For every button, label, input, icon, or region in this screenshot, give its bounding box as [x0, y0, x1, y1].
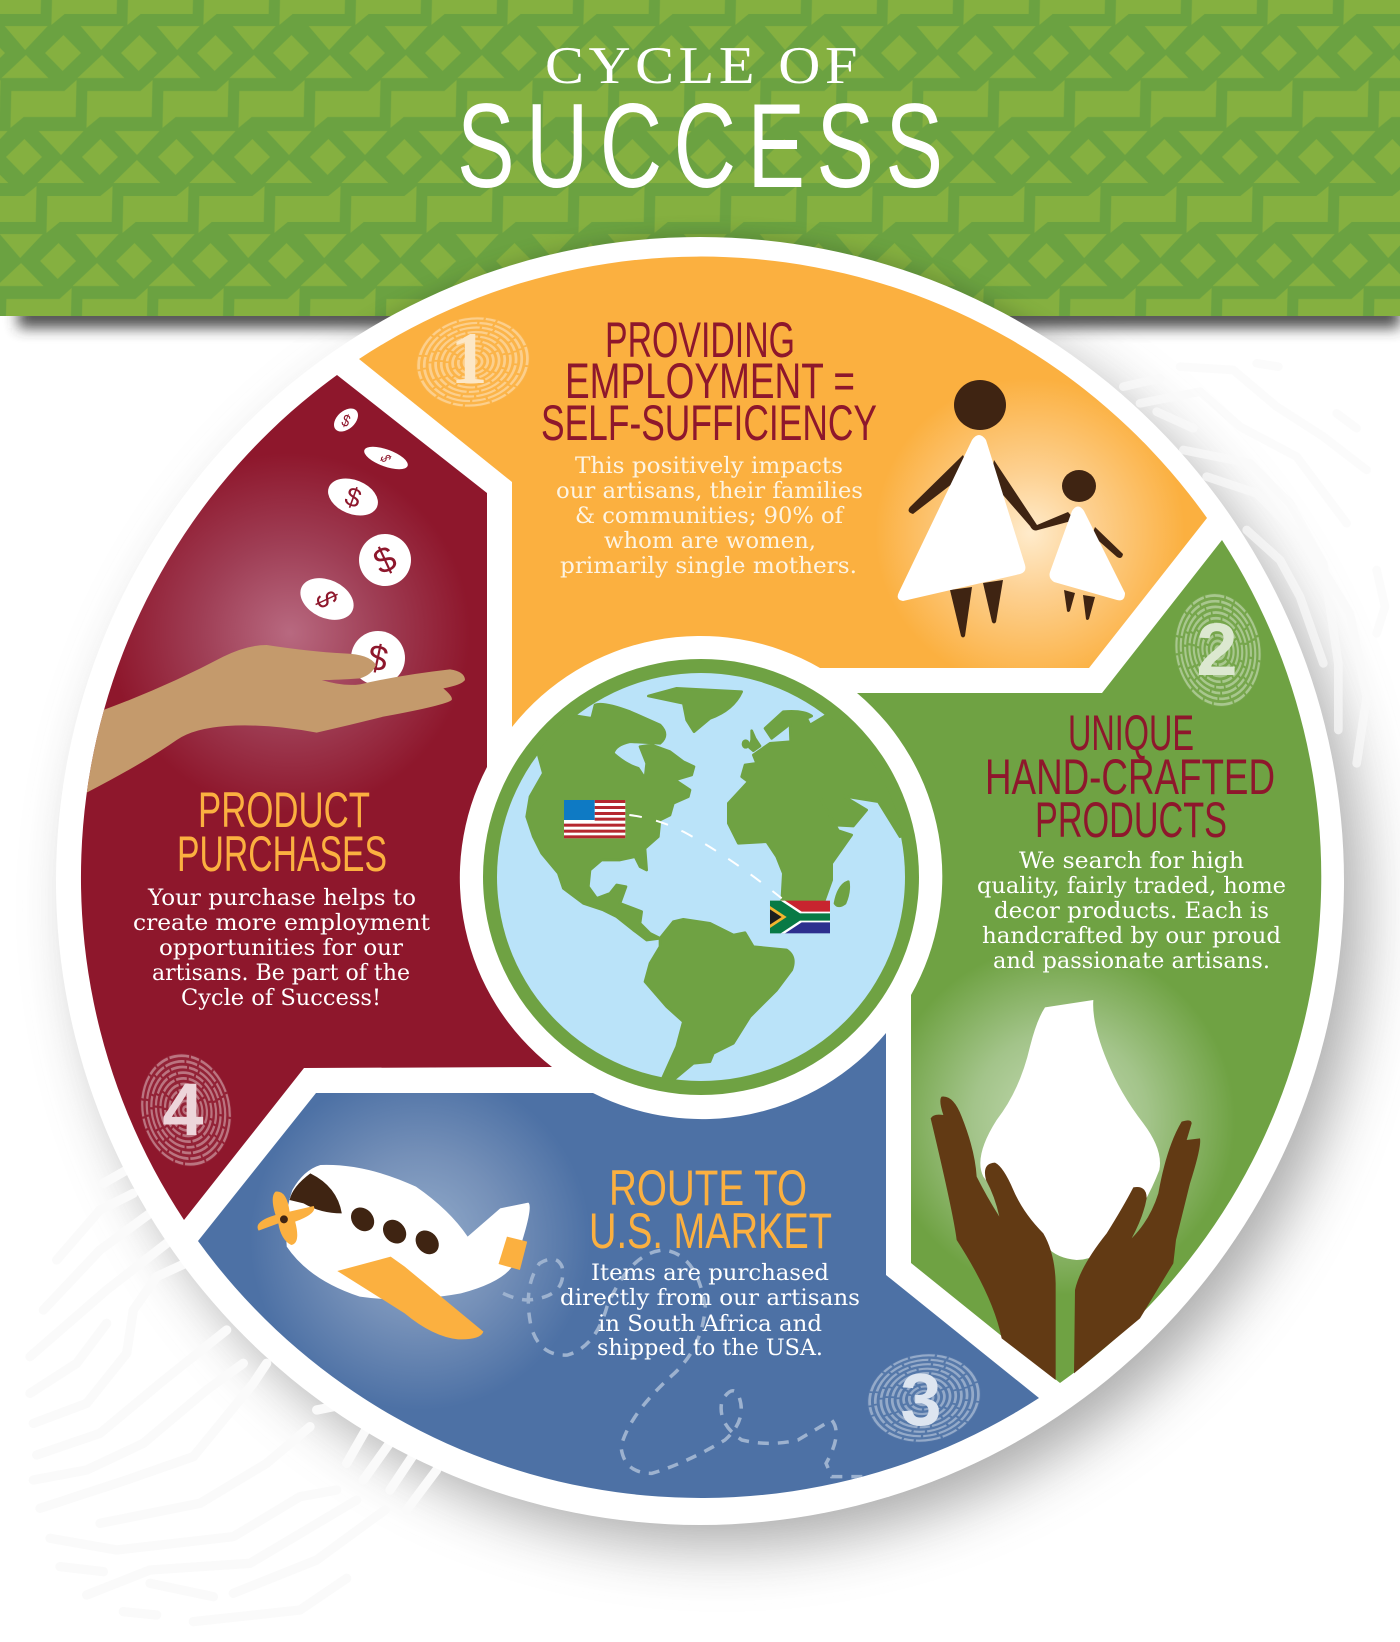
heading 3: U.S. MARKET	[589, 1203, 832, 1259]
panel 1: orange employment	[359, 257, 1207, 727]
number 4 with fingerprint	[130, 1045, 242, 1175]
heading 2	[985, 705, 1275, 848]
banner shadow	[18, 304, 1400, 328]
body 4: Cycle of Success!	[181, 986, 381, 1011]
icon: falling coins	[294, 404, 411, 685]
body 3: in South Africa and	[598, 1312, 822, 1337]
heading 1: PROVIDING	[605, 312, 795, 368]
number 2 with fingerprint: 2	[1196, 608, 1238, 691]
body 1: our artisans, their families	[556, 479, 863, 504]
heading 2: HAND-CRAFTED	[985, 749, 1275, 805]
title line: success: SUCCESS	[457, 79, 943, 213]
heading 1: EMPLOYMENT =	[565, 353, 855, 409]
title line: cycle of: CYCLE OF	[545, 36, 857, 95]
body 2: and passionate artisans.	[993, 949, 1270, 974]
number 4 with fingerprint: 4	[162, 1068, 204, 1151]
body 1: This positively impacts	[575, 454, 843, 479]
title	[457, 36, 943, 213]
body 3: Items are purchased	[591, 1261, 829, 1286]
icon: falling coins: $	[309, 586, 345, 612]
panel 3: blue route	[198, 1033, 1039, 1498]
flag: South Africa	[770, 901, 830, 933]
body 1: whom are women,	[604, 529, 816, 554]
heading 4: PURCHASES	[177, 826, 387, 882]
icon: open hand	[70, 645, 465, 800]
number 3 with fingerprint: 3	[900, 1358, 942, 1441]
body 2: decor products. Each is	[994, 899, 1269, 924]
body 4: opportunities for our	[159, 936, 403, 961]
heading 2: PRODUCTS	[1035, 792, 1227, 848]
number 1 with fingerprint: 1	[450, 318, 488, 400]
background fingerprint: bottom left	[30, 1170, 437, 1622]
body 2: We search for high	[1019, 849, 1244, 874]
body 2: quality, fairly traded, home	[977, 874, 1286, 899]
icon: falling coins: $	[339, 411, 353, 432]
dashed route line	[629, 815, 782, 898]
body 4: Your purchase helps to	[147, 886, 416, 911]
banner: green patterned header	[0, 0, 1400, 316]
globe	[483, 659, 937, 1095]
icon: falling coins: $	[341, 481, 365, 514]
heading 1	[541, 312, 877, 451]
body 3: directly from our artisans	[560, 1286, 860, 1311]
white wheel	[56, 237, 1344, 1525]
icon: vase in hands	[931, 1000, 1200, 1380]
body 1: & communities; 90% of	[575, 504, 845, 529]
body 3	[560, 1261, 860, 1361]
body 4: artisans. Be part of the	[152, 961, 410, 986]
body 1: primarily single mothers.	[560, 554, 857, 579]
body 4: create more employment	[133, 911, 430, 936]
flag: USA	[564, 800, 625, 838]
icon: mother and child	[898, 380, 1125, 638]
circle shadow over banner	[382, 229, 1032, 316]
body 2	[977, 849, 1286, 974]
body 2: handcrafted by our proud	[982, 924, 1281, 949]
body 1	[556, 454, 863, 579]
body 4	[133, 886, 430, 1011]
icon: falling coins: $	[367, 537, 402, 582]
heading 4	[177, 782, 387, 882]
globe ocean and ring	[483, 659, 919, 1095]
continents	[520, 688, 937, 1080]
icon: airplane	[258, 1165, 530, 1339]
icon: falling coins: $	[377, 453, 395, 464]
background fingerprint: top right	[1123, 363, 1385, 763]
heading 3	[589, 1160, 832, 1259]
icon: falling coins: $	[364, 636, 392, 680]
number 2 with fingerprint	[1167, 588, 1269, 712]
number 1 with fingerprint	[409, 308, 537, 416]
number 3 with fingerprint	[860, 1345, 988, 1451]
heading 4: PRODUCT	[198, 782, 370, 838]
heading 2: UNIQUE	[1068, 705, 1194, 761]
panel 4: maroon purchases	[70, 375, 552, 1220]
circle drop shadow	[82, 266, 1362, 1546]
dashed flight path	[503, 1250, 871, 1477]
body 3: shipped to the USA.	[597, 1336, 823, 1361]
heading 1: SELF-SUFFICIENCY	[541, 395, 877, 451]
heading 3: ROUTE TO	[609, 1160, 807, 1216]
panel 2: green products	[857, 540, 1321, 1383]
